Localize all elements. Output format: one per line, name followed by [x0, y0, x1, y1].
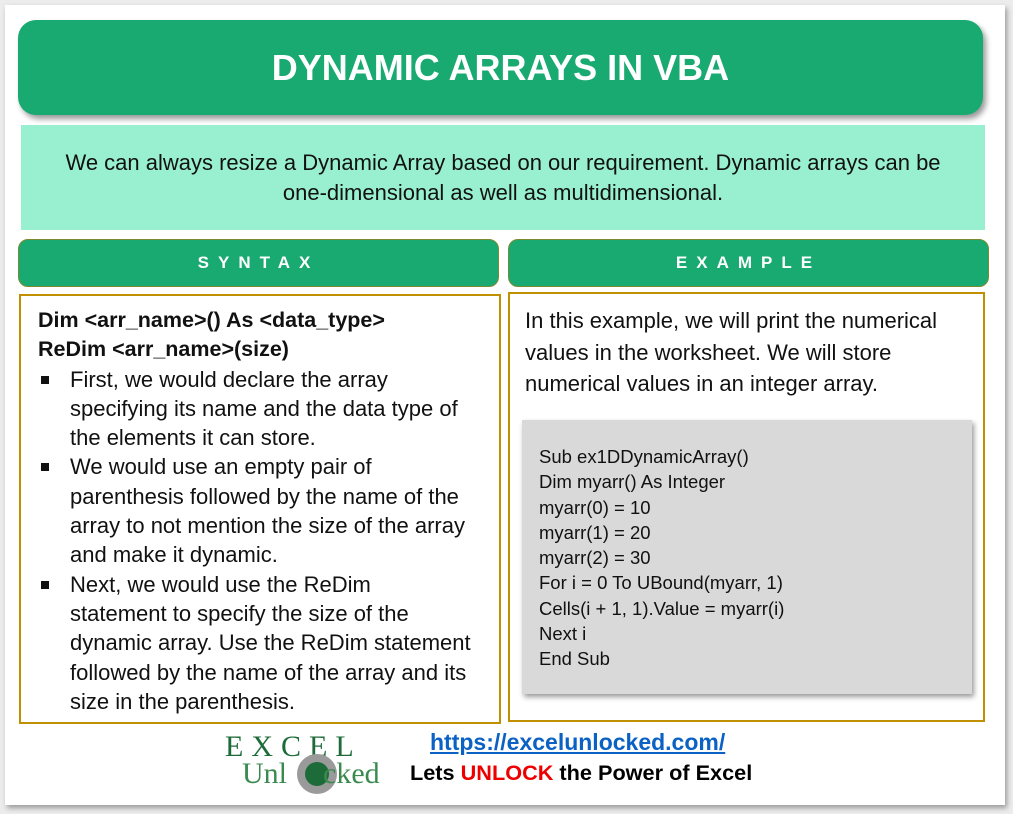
panel: syntax: Dim <arr_name>() As <data_type> [38, 308, 385, 332]
heading: example: EXAMPLE [676, 253, 821, 272]
description: We can always resize a Dynamic Array based on our requirement. Dynamic arrays can be [65, 150, 941, 175]
panel: syntax: array to not mention the size of the array [70, 513, 465, 538]
panel: syntax: and make it dynamic. [70, 542, 278, 567]
panel: syntax: specifying its name and the data type of [70, 396, 458, 421]
panel: example: In this example, we will print the numerical [525, 308, 937, 333]
logo [225, 730, 380, 794]
code block: myarr(1) = 20 [539, 522, 651, 543]
code block: Cells(i + 1, 1).Value = myarr(i) [539, 598, 784, 619]
code block: For i = 0 To UBound(myarr, 1) [539, 572, 783, 593]
tagline: Lets UNLOCK the Power of Excel [410, 760, 752, 785]
title [18, 20, 983, 115]
code block: Dim myarr() As Integer [539, 471, 725, 492]
panel: syntax: followed by the name of the array and its [70, 660, 466, 685]
code block: End Sub [539, 648, 610, 669]
logo: Unl cked [242, 757, 380, 790]
code block: Sub ex1DDynamicArray() [539, 446, 749, 467]
heading: syntax: SYNTAX [198, 253, 319, 272]
panel: syntax: the elements it can store. [70, 425, 316, 450]
panel: syntax: size in the parenthesis. [70, 689, 295, 714]
heading: syntax [18, 239, 499, 287]
description: one-dimensional as well as multidimensional. [283, 180, 723, 205]
panel: syntax: statement to specify the size of the [70, 601, 409, 626]
panel: example: values in the worksheet. We will store [525, 340, 891, 364]
code block: myarr(0) = 10 [539, 497, 651, 518]
panel: example: numerical values in an integer array. [525, 371, 878, 396]
title: DYNAMIC ARRAYS IN VBA [272, 47, 729, 88]
code block: myarr(2) = 30 [539, 547, 651, 568]
panel: syntax: First, we would declare the array [70, 367, 388, 392]
code block [522, 420, 972, 694]
panel: syntax: parenthesis followed by the name of the [70, 484, 459, 509]
panel: syntax: ReDim <arr_name>(size) [38, 337, 289, 361]
panel: example [508, 292, 985, 722]
heading: example [508, 239, 989, 287]
logo: EXCEL [225, 730, 362, 763]
code block: Next i [539, 623, 586, 644]
panel: syntax: Next, we would use the ReDim [70, 572, 371, 597]
description [21, 125, 985, 230]
panel: syntax: dynamic array. Use the ReDim statement [70, 630, 471, 655]
panel: syntax [19, 294, 501, 724]
link: https://excelunlocked.com/ [430, 729, 725, 755]
panel: syntax: We would use an empty pair of [70, 454, 372, 479]
